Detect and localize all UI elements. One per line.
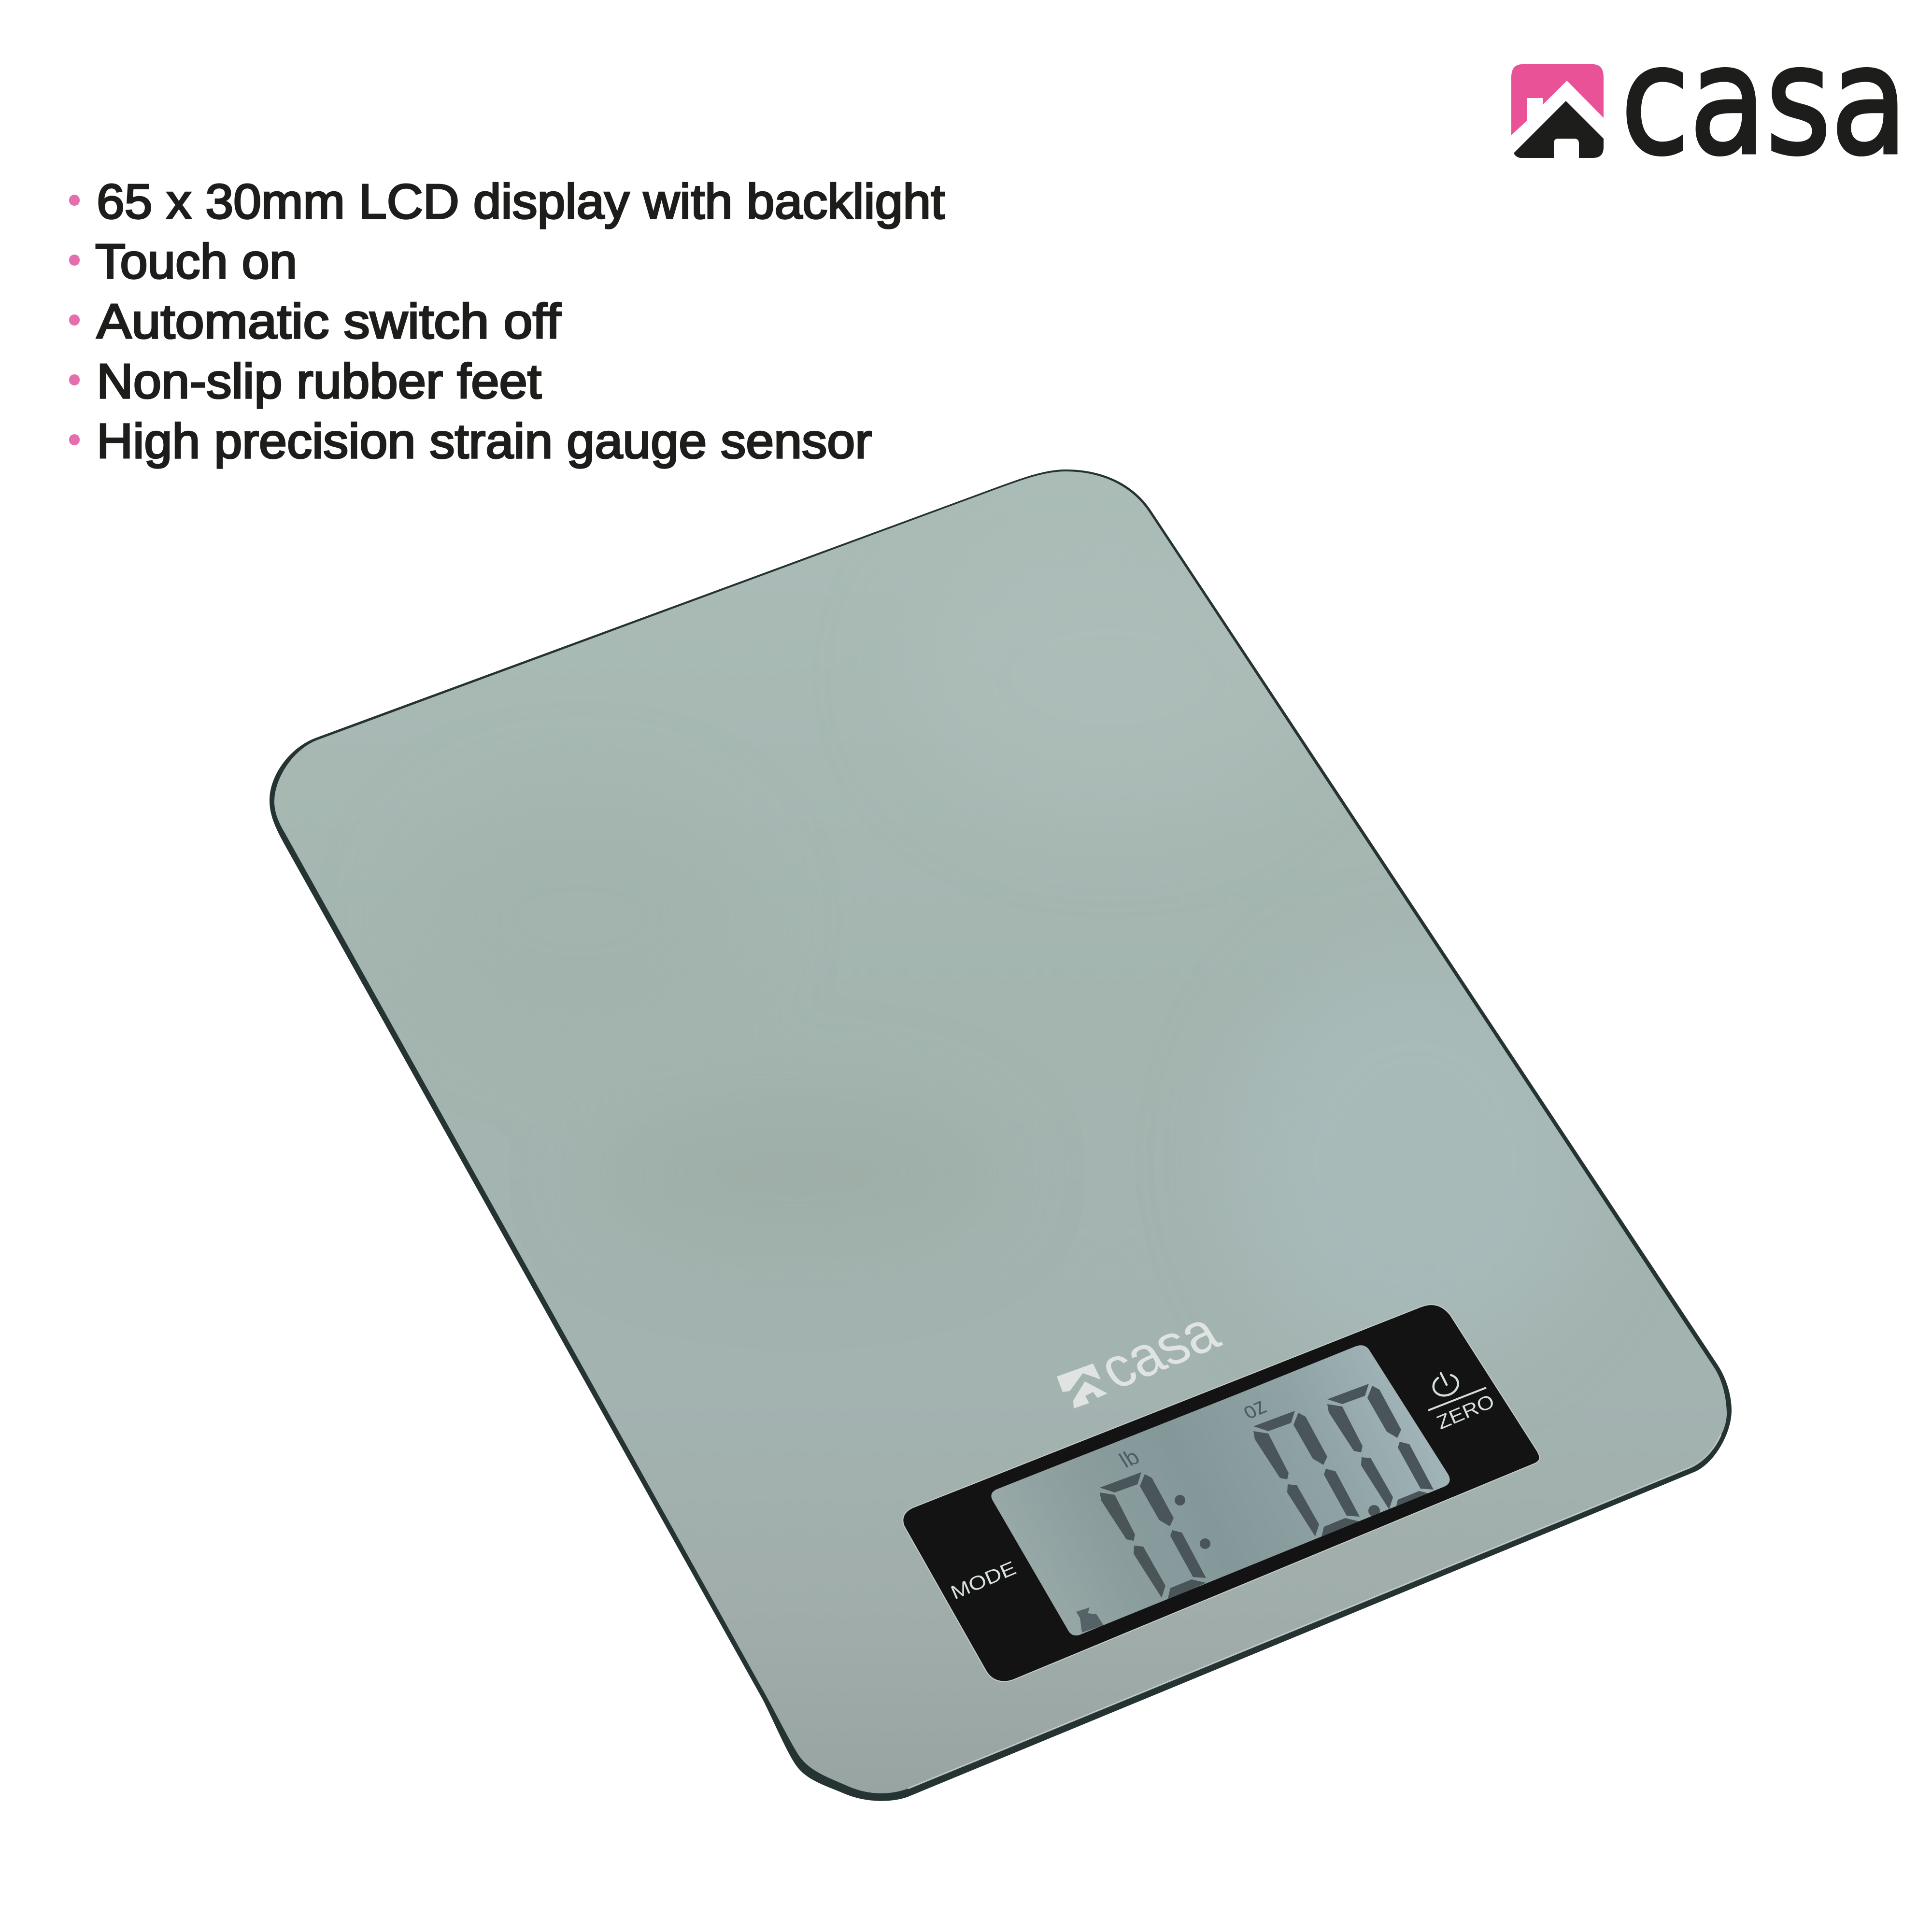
bullet 1 xyxy=(69,195,80,206)
scale top surface xyxy=(274,471,1727,1793)
feature: LCD display: 65 x 30mm LCD display with backlight xyxy=(97,175,945,229)
digit 2 xyxy=(1253,1411,1360,1539)
feature: touch on: Touch on xyxy=(95,235,297,289)
scale base edge xyxy=(270,469,1732,1801)
bullet 3 xyxy=(69,314,80,326)
feature: strain gauge sensor: High precision strain gauge sensor xyxy=(97,414,872,469)
logo mark: black house xyxy=(1514,101,1604,158)
kitchen scale product xyxy=(270,469,1732,1801)
engraved wordmark: casa xyxy=(1088,1299,1230,1401)
digit 1 xyxy=(1100,1472,1206,1600)
feature list xyxy=(69,175,945,469)
logo mark: pink roof xyxy=(1511,64,1604,135)
decimal point xyxy=(1368,1505,1380,1517)
engraved logo mark xyxy=(1057,1364,1108,1408)
bullet 5 xyxy=(69,434,80,445)
brand logo xyxy=(1511,14,1907,188)
feature: automatic switch off: Automatic switch off xyxy=(97,295,561,349)
ZERO button label: ZERO xyxy=(1434,1391,1498,1434)
colon separator xyxy=(1175,1495,1210,1549)
LCD stability icon xyxy=(1076,1607,1104,1633)
bullet 2 xyxy=(69,255,80,266)
MODE button label: MODE xyxy=(948,1557,1019,1604)
unit label oz: oz xyxy=(1237,1393,1271,1424)
bullet 4 xyxy=(69,374,80,385)
digit 3 xyxy=(1327,1384,1434,1512)
LCD digits xyxy=(1076,1384,1434,1633)
divider line under power icon xyxy=(1428,1388,1486,1410)
power icon xyxy=(1434,1373,1458,1395)
feature: rubber feet: Non-slip rubber feet xyxy=(97,355,541,409)
display bezel xyxy=(903,1305,1540,1681)
unit label lb: lb xyxy=(1115,1444,1144,1472)
LCD screen xyxy=(991,1345,1450,1635)
engraved casa logo on scale xyxy=(1057,1299,1230,1408)
